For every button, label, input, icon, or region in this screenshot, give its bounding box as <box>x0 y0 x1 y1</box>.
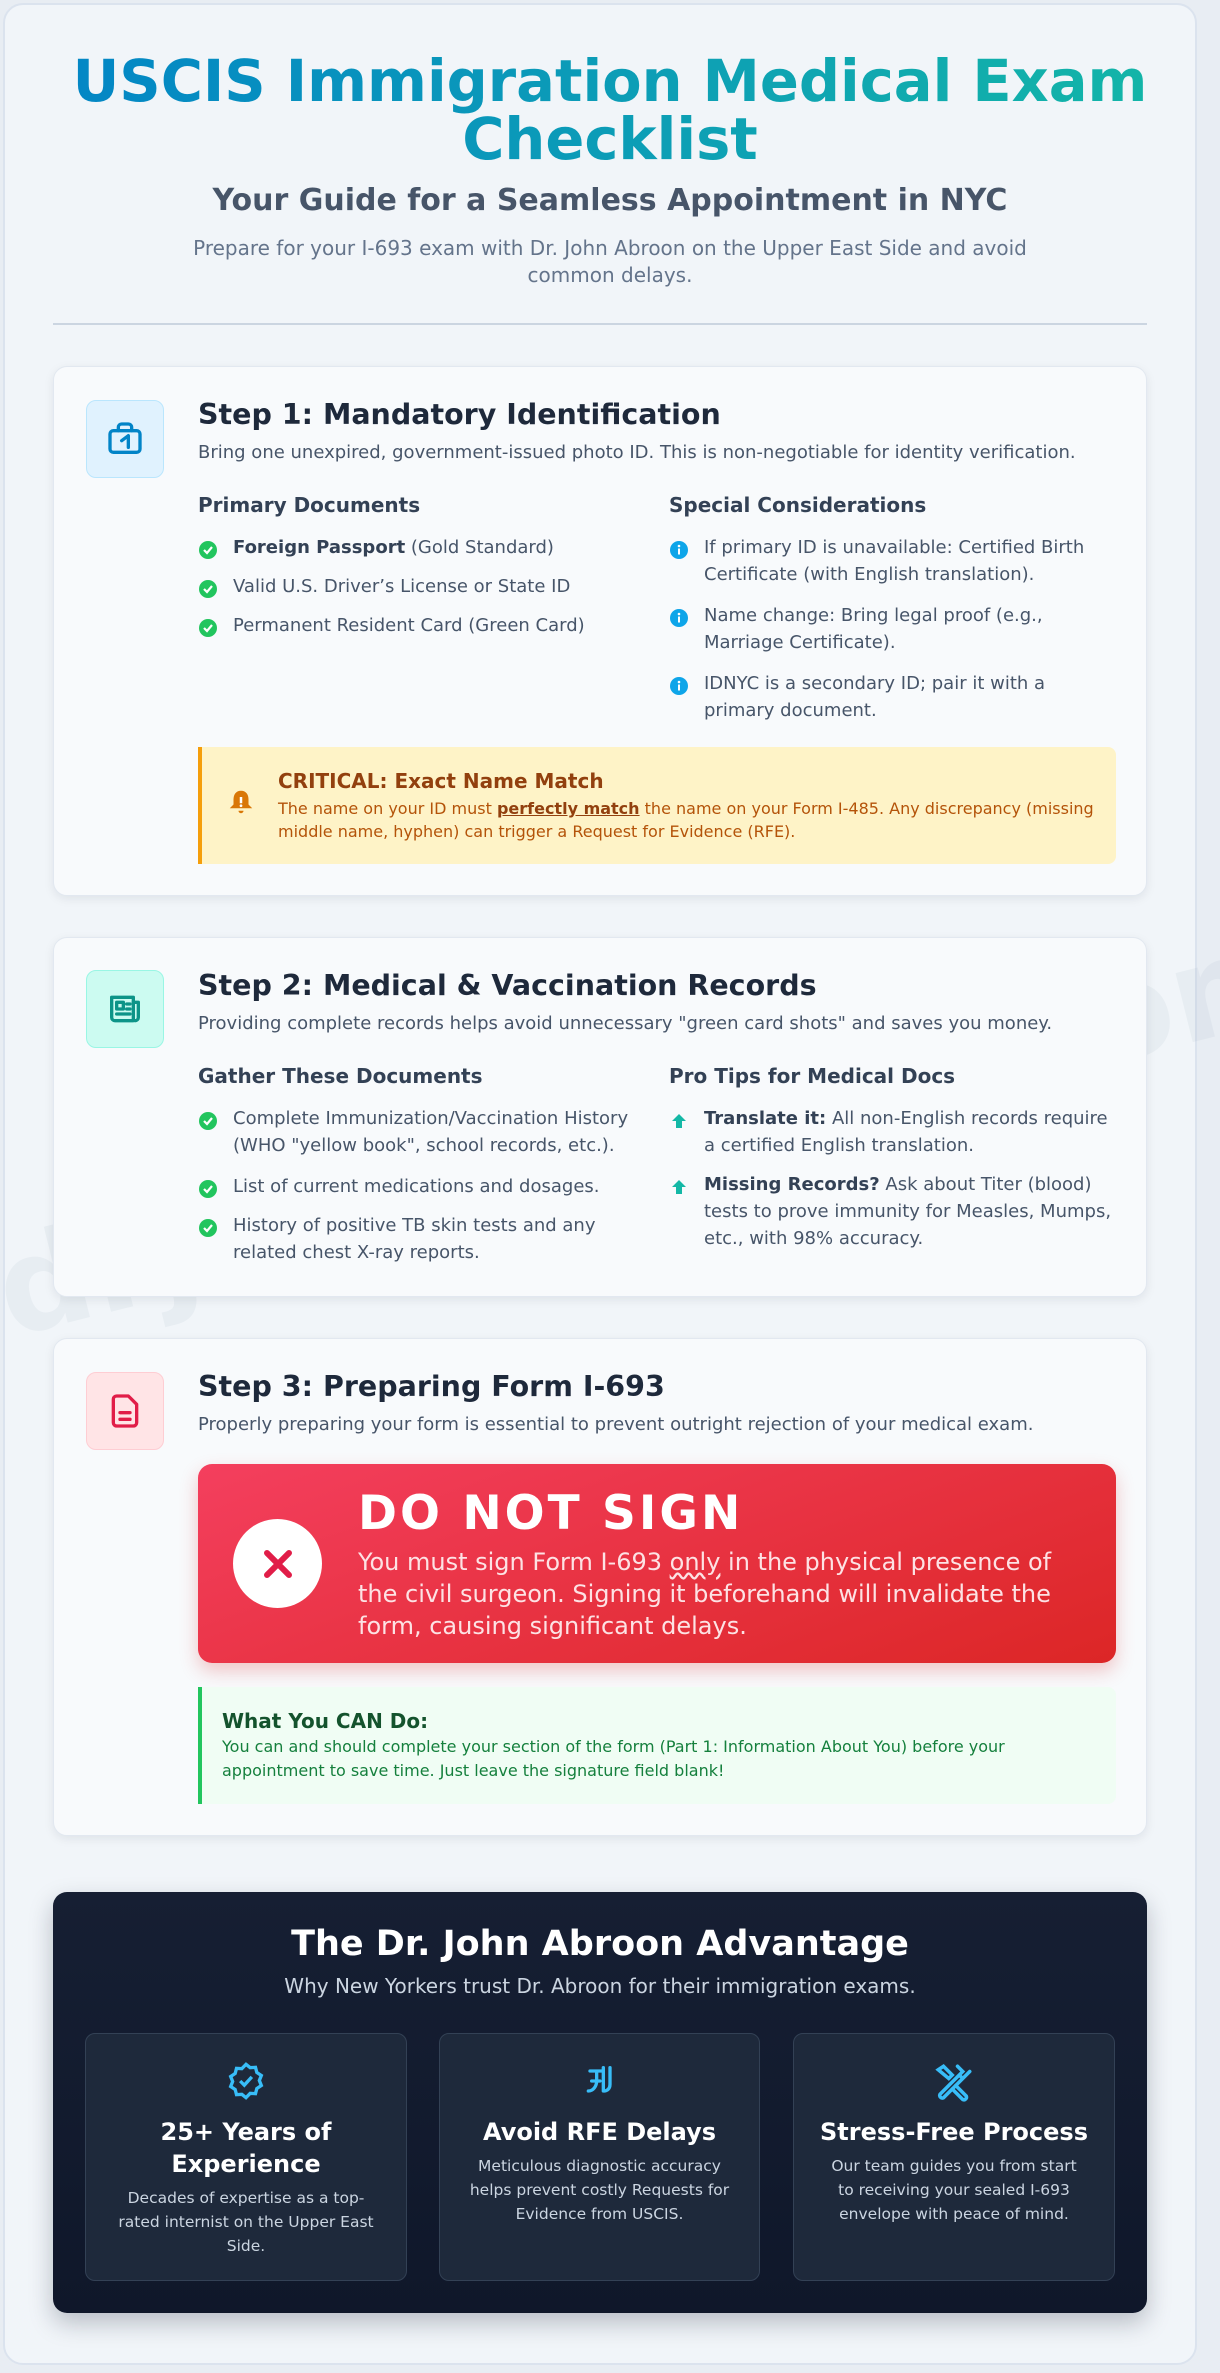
subtitle: Your Guide for a Seamless Appointment in NYC <box>213 183 1007 218</box>
column: primary documents: Valid U.S. Driver’s License or State ID <box>233 576 570 597</box>
column: gather documents: History of positive TB skin tests and any <box>233 1215 596 1236</box>
icon: records <box>86 970 164 1048</box>
card: experience: Experience <box>171 2150 321 2178</box>
icon: id card <box>86 400 164 478</box>
description: Properly preparing your form is essential to prevent outright rejection of your medical exam. <box>198 1414 1033 1435</box>
card: avoid rfe <box>439 2033 760 2281</box>
icon: figure <box>586 2066 612 2093</box>
column: gather documents <box>198 1064 628 1263</box>
column: special considerations: primary document. <box>704 700 877 721</box>
callout: what you can do <box>198 1687 1116 1804</box>
icon: tools <box>935 2064 972 2102</box>
callout: what you can do: You can and should complete your section of the form (Part 1: Information About You) before your appointment to save time. Just leave the signature field blank! <box>222 1737 1005 1780</box>
card: experience: Decades of expertise as a top-rated internist on the Upper East Side. <box>118 2189 374 2255</box>
callout: critical name match: The name on your ID must perfectly match the name on your Form I-485. Any discrepancy (missing middle name, hyphen) can trigger a Request for Evidence (RFE). <box>278 799 1094 841</box>
icon: warning bell <box>230 790 252 814</box>
column: gather documents: Gather These Documents <box>198 1064 483 1088</box>
column: primary documents: Primary Documents <box>198 493 420 517</box>
callout: do not sign <box>198 1464 1116 1663</box>
card: stress-free: Stress-Free Process <box>820 2118 1088 2146</box>
column: pro tips: Translate it: All non-English records require a certified English translation. <box>704 1108 1108 1156</box>
icon: x circle <box>233 1519 322 1608</box>
intro text: Prepare for your I-693 exam with Dr. John Abroon on the Upper East Side and avoid common delays. <box>193 236 1027 287</box>
column: special considerations: Marriage Certificate). <box>704 632 896 653</box>
column: primary documents: Foreign Passport (Gold Standard) <box>233 537 554 558</box>
card: experience: 25+ Years of <box>161 2118 331 2146</box>
icon: badge <box>228 2062 264 2100</box>
column: primary documents <box>198 493 585 637</box>
card: avoid rfe: Meticulous diagnostic accuracy helps prevent costly Requests for Evidence from USCIS. <box>470 2157 729 2223</box>
column: pro tips: Pro Tips for Medical Docs <box>669 1064 955 1088</box>
callout: do not sign: DO NOT SIGN <box>358 1486 743 1541</box>
column: special considerations: Name change: Bring legal proof (e.g., <box>704 605 1043 626</box>
title <box>0 53 1220 169</box>
column: gather documents: related chest X-ray reports. <box>233 1242 480 1263</box>
panel: step 3 <box>53 1338 1147 1836</box>
description: Bring one unexpired, government-issued photo ID. This is non-negotiable for identity verification. <box>198 442 1076 463</box>
panel: advantage <box>53 1892 1147 2313</box>
card: stress-free <box>793 2033 1115 2281</box>
column: special considerations: IDNYC is a secondary ID; pair it with a <box>704 673 1045 694</box>
column: gather documents: Complete Immunization/Vaccination History (WHO "yellow book", school records, etc.). <box>233 1108 628 1156</box>
card: stress-free: Our team guides you from start to receiving your sealed I-693 envelope with peace of mind. <box>831 2157 1077 2223</box>
subheading: Why New Yorkers trust Dr. Abroon for their immigration exams. <box>284 1974 916 1998</box>
column: special considerations: Special Considerations <box>669 493 926 517</box>
heading: The Dr. John Abroon Advantage <box>291 1924 909 1964</box>
panel: step 1 <box>53 366 1147 896</box>
title: Checklist <box>462 106 758 173</box>
column: special considerations <box>669 493 1084 721</box>
column: gather documents: List of current medications and dosages. <box>233 1176 600 1197</box>
column: pro tips <box>669 1064 1111 1249</box>
heading: Step 3: Preparing Form I-693 <box>198 1370 665 1403</box>
title: USCIS Immigration Medical Exam <box>73 48 1147 115</box>
callout: critical name match <box>198 747 1116 864</box>
column: primary documents: Permanent Resident Card (Green Card) <box>233 615 585 636</box>
callout: what you can do: What You CAN Do: <box>222 1709 428 1733</box>
callout: do not sign: You must sign Form I-693 only in the physical presence of the civil surgeon. Signing it beforehand will invalidate the form, causing significant delays. <box>358 1548 1051 1640</box>
description: Providing complete records helps avoid unnecessary "green card shots" and saves you money. <box>198 1013 1052 1034</box>
column: pro tips: Missing Records? Ask about Titer (blood) tests to prove immunity for Measles, Mumps, etc., with 98% accuracy. <box>704 1174 1111 1249</box>
heading: Step 1: Mandatory Identification <box>198 398 721 431</box>
heading: Step 2: Medical & Vaccination Records <box>198 969 817 1002</box>
panel: step 2 <box>53 937 1147 1297</box>
card: experience <box>85 2033 407 2281</box>
card: avoid rfe: Avoid RFE Delays <box>483 2118 716 2146</box>
column: special considerations: If primary ID is unavailable: Certified Birth Certificate (with English translation). <box>704 537 1084 585</box>
callout: critical name match: CRITICAL: Exact Name Match <box>278 769 604 793</box>
icon: document <box>86 1372 164 1450</box>
